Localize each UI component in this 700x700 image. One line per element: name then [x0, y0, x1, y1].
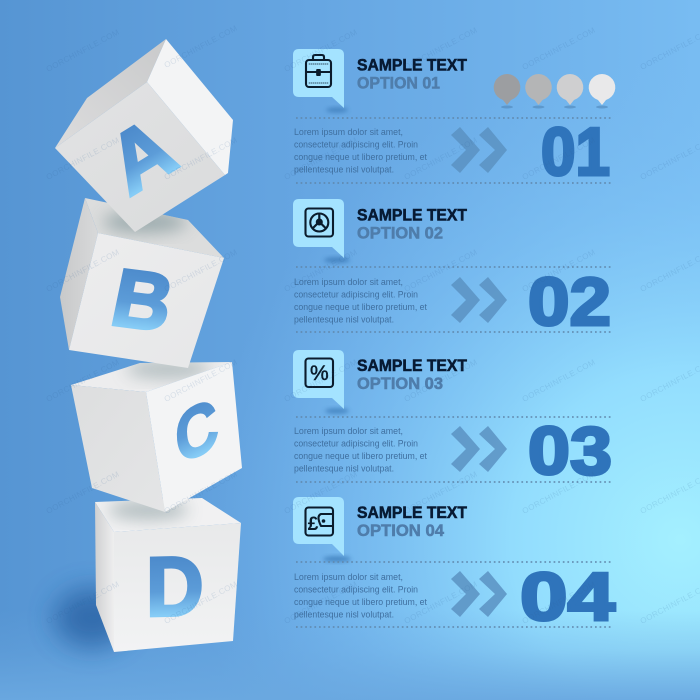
cube D [95, 498, 241, 652]
body text 04: pellentesque nisl volutpat. [294, 610, 394, 620]
letter D: D [146, 540, 204, 634]
arrow: double chevron 02 [451, 277, 507, 323]
watermark: OORCHINFILE.COM [163, 136, 239, 182]
watermark: OORCHINFILE.COM [283, 136, 359, 182]
icon: percent [306, 358, 333, 387]
body text 01: pellentesque nisl volutpat. [294, 164, 394, 176]
watermark: OORCHINFILE.COM [45, 358, 121, 404]
watermark: OORCHINFILE.COM [521, 248, 597, 294]
number 02: 02 [528, 264, 611, 340]
ground shadow of cube stack [54, 588, 130, 648]
option 02 [293, 199, 613, 340]
body text 04: congue neque ut libero pretium, et [294, 597, 427, 608]
body text 02: congue neque ut libero pretium, et [294, 302, 427, 313]
watermark: OORCHINFILE.COM [163, 470, 239, 516]
heading 04: SAMPLE TEXT [357, 504, 467, 522]
body text 02: Lorem ipsum dolor sit amet, [294, 277, 403, 288]
number 04: 04 [520, 559, 615, 635]
watermark: OORCHINFILE.COM [163, 24, 239, 70]
icon: percent: % [310, 362, 329, 385]
watermark: OORCHINFILE.COM [403, 26, 479, 72]
number 03: 03 [528, 413, 612, 489]
watermark: OORCHINFILE.COM [403, 136, 479, 182]
speech bubble 03 [293, 350, 349, 414]
option 04 [293, 497, 615, 635]
cube B [60, 198, 224, 368]
body text 02 [294, 277, 427, 326]
subheading 04: OPTION 04 [357, 522, 445, 540]
colour pins [494, 74, 615, 108]
watermark: OORCHINFILE.COM [45, 248, 121, 294]
body text 03 [294, 426, 427, 474]
cube C [71, 359, 242, 512]
body text 04: Lorem ipsum dolor sit amet, [294, 572, 403, 583]
body text 03: congue neque ut libero pretium, et [294, 451, 427, 462]
body text 03: pellentesque nisl volutpat. [294, 464, 394, 474]
watermark: OORCHINFILE.COM [283, 358, 359, 404]
watermark: OORCHINFILE.COM [283, 580, 359, 626]
arrow: double chevron 01 [451, 127, 507, 173]
watermark: OORCHINFILE.COM [521, 358, 597, 404]
icon: steering wheel [306, 208, 333, 236]
watermark: OORCHINFILE.COM [283, 470, 359, 516]
heading 01: SAMPLE TEXT [357, 56, 467, 74]
body text 01: congue neque ut libero pretium, et [294, 152, 427, 163]
body text 01: Lorem ipsum dolor sit amet, [294, 127, 403, 138]
watermark: OORCHINFILE.COM [163, 248, 239, 294]
watermark: OORCHINFILE.COM [45, 580, 121, 626]
body text 02: pellentesque nisl volutpat. [294, 314, 394, 326]
arrow: double chevron 03 [451, 426, 507, 472]
subheading 02: OPTION 02 [357, 224, 443, 242]
arrow: double chevron 04 [451, 571, 507, 617]
watermark: OORCHINFILE.COM [521, 580, 597, 626]
icon: briefcase [306, 55, 331, 87]
watermark: OORCHINFILE.COM [521, 26, 597, 72]
body text 04: consectetur adipiscing elit. Proin [294, 584, 418, 596]
body text 01: consectetur adipiscing elit. Proin [294, 140, 418, 150]
watermark: OORCHINFILE.COM [163, 580, 239, 626]
watermark: OORCHINFILE.COM [403, 248, 479, 294]
subheading 01: OPTION 01 [357, 74, 440, 92]
watermark: OORCHINFILE.COM [403, 580, 479, 626]
speech bubble 02 [293, 199, 350, 263]
icon: pound wallet [306, 508, 333, 536]
heading 02: SAMPLE TEXT [357, 206, 467, 224]
subheading 03: OPTION 03 [357, 375, 443, 393]
watermark: OORCHINFILE.COM [163, 358, 239, 404]
watermark: OORCHINFILE.COM [283, 248, 359, 294]
body text 04 [294, 572, 427, 620]
icon: pound wallet: £ [308, 514, 319, 535]
watermark: OORCHINFILE.COM [403, 358, 479, 404]
cube A [55, 39, 233, 232]
speech bubble 04 [293, 497, 351, 562]
watermark: OORCHINFILE.COM [45, 28, 121, 74]
watermark: OORCHINFILE.COM [521, 470, 597, 516]
body text 01 [294, 127, 427, 176]
body text 02: consectetur adipiscing elit. Proin [294, 290, 418, 300]
heading 03: SAMPLE TEXT [357, 357, 467, 375]
option 03 [293, 350, 613, 489]
body text 03: consectetur adipiscing elit. Proin [294, 438, 418, 450]
watermark: OORCHINFILE.COM [45, 136, 121, 182]
option 01 [293, 49, 615, 190]
letter B: B [104, 253, 180, 349]
watermark: OORCHINFILE.COM [283, 28, 359, 74]
letter A: A [94, 98, 189, 213]
speech bubble 01 [293, 49, 348, 113]
watermark: OORCHINFILE.COM [403, 470, 479, 516]
body text 03: Lorem ipsum dolor sit amet, [294, 426, 403, 437]
letter C: C [172, 383, 222, 481]
watermark: OORCHINFILE.COM [521, 136, 597, 182]
watermark: OORCHINFILE.COM [45, 470, 121, 516]
number 01: 01 [541, 114, 610, 190]
